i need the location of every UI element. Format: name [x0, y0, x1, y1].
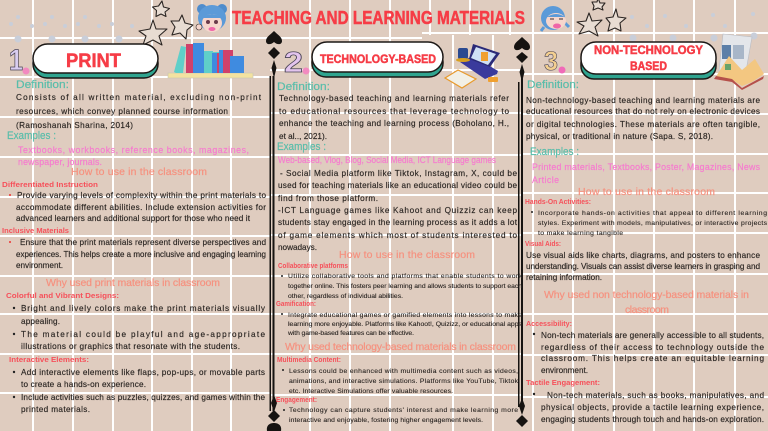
why used non technology-based materials: regardless of their access to technology outside the — [541, 343, 764, 352]
why used print materials: to create a hands-on experience. — [21, 380, 146, 389]
heading pill: non-technology based: NON-TECHNOLOGY — [594, 45, 703, 57]
how to use in the classroom: accommodate different abilities. Include extension activities for — [16, 203, 266, 212]
examples: -ICT Language games like Kahoot and Quizziz can keep — [278, 206, 517, 215]
examples — [7, 130, 249, 167]
icon: chibi girl left — [196, 4, 227, 32]
icon: newspaper and open book — [714, 34, 764, 90]
how to use in the classroom: styles. Experiment with models, manipulatives, or interactive projects — [538, 220, 768, 227]
why used technology-based materials: Lessons could be enhanced with multimedia content such as videos, — [289, 368, 518, 375]
why used non technology-based materials — [526, 289, 764, 424]
why used print materials: illustrations or graphics that resonate with the students. — [21, 342, 240, 351]
how to use in the classroom — [525, 186, 768, 282]
why used non technology-based materials: environment. — [541, 366, 588, 375]
how to use in the classroom — [276, 249, 523, 337]
panel: print — [2, 43, 266, 414]
how to use in the classroom: Differentiated Instruction — [2, 180, 98, 189]
number 3 — [544, 46, 566, 76]
examples: Article — [532, 175, 559, 185]
why used non technology-based materials: Non-tech materials are generally accessible to all students, — [541, 331, 764, 340]
how to use in the classroom: Use visual aids like charts, diagrams, and posters to enhance — [526, 251, 760, 260]
how to use in the classroom: Collaborative platforms — [278, 261, 348, 270]
why used print materials: Interactive Elements: — [9, 355, 89, 364]
heading pill: non-technology based: BASED — [630, 61, 667, 73]
examples: Textbooks, workbooks, reference books, magazines, — [18, 145, 249, 155]
examples: nowadays. — [278, 243, 317, 252]
examples: students stay engaged in the learning process as it adds a lot — [278, 218, 518, 227]
examples: newspaper, journals. — [18, 157, 102, 167]
examples: Examples : — [7, 130, 56, 142]
definition: educational resources that do not rely on electronic devices — [526, 107, 760, 116]
how to use in the classroom: with game-based features can be effective. — [287, 330, 414, 337]
examples: Examples : — [277, 141, 326, 153]
why used non technology-based materials: Tactile Engagement: — [526, 378, 600, 387]
why used non technology-based materials: classroom. This helps create an equitable learning — [541, 354, 764, 363]
definition: Definition: — [527, 79, 579, 91]
why used non technology-based materials: physical objects, provide a tactile learning experience, — [541, 403, 764, 412]
definition: Definition: — [16, 79, 69, 91]
why used non technology-based materials: classroom — [625, 304, 669, 316]
why used technology-based materials: etc. Interactive Simulations offer valuable resources. — [289, 388, 453, 395]
why used print materials — [6, 277, 266, 414]
title: TEACHING AND LEARNING MATERIALS — [232, 8, 525, 28]
how to use in the classroom: Hands-On Activities: — [525, 197, 591, 206]
definition — [526, 79, 760, 141]
number 3: 3 — [544, 46, 558, 76]
why used print materials: Why used print materials in classroom — [46, 277, 220, 289]
why used technology-based materials: Why used technology-based materials in classroom — [285, 341, 516, 353]
panel: technology-based — [276, 42, 523, 424]
heading pill: technology-based — [312, 42, 443, 77]
how to use in the classroom: How to use in the classroom — [339, 249, 475, 261]
how to use in the classroom: Incorporate hands-on activities that appeal to different learning — [538, 210, 767, 217]
number 2: 2 — [284, 47, 303, 79]
why used print materials: The material could be playful and age-appropriate — [21, 330, 265, 339]
definition: et al.., 2021). — [279, 132, 327, 141]
why used print materials: Include activities such as puzzles, quizzes, and games within the — [21, 393, 265, 402]
definition: Technology-based teaching and learning materials refer — [279, 94, 509, 103]
how to use in the classroom: understanding. Visuals can assist diverse learners in grasping and — [526, 262, 760, 271]
why used non technology-based materials: engaging students through touch and hands-on exploration. — [541, 415, 764, 424]
why used technology-based materials: interactive and enjoyable, fostering higher engagement levels. — [289, 417, 483, 424]
divider: left ornament and rules — [266, 31, 282, 431]
definition: Consists of all written material, excluding non-print — [16, 93, 262, 102]
examples — [277, 141, 518, 252]
icon: stars left — [139, 1, 193, 45]
how to use in the classroom — [2, 166, 266, 270]
definition: or digital technologies. These materials are often tangible, — [526, 120, 760, 129]
heading pill: print — [33, 44, 158, 78]
definition — [16, 79, 262, 130]
how to use in the classroom: to make learning tangible — [538, 230, 623, 237]
examples — [530, 146, 761, 185]
heading pill: print: PRINT — [66, 51, 121, 72]
heading pill: technology-based: TECHNOLOGY-BASED — [320, 52, 436, 66]
examples: used for teaching materials like an educational video could be — [278, 181, 517, 190]
how to use in the classroom: other, regardless of individual abilities. — [288, 293, 403, 300]
panel: non-technology-based — [525, 34, 768, 424]
decoration: hanging dots top right — [630, 12, 758, 42]
how to use in the classroom: experiences. This helps create a more inclusive and engaging learning — [16, 250, 266, 259]
icon: laptop, mug and notebook — [445, 44, 500, 88]
definition: Definition: — [277, 81, 330, 93]
definition: resources, which convey planned course information — [16, 107, 228, 116]
how to use in the classroom: together online. This fosters peer learning and allows students to support each — [288, 283, 522, 290]
divider: right ornament and rules — [514, 37, 530, 427]
how to use in the classroom: Integrate educational games or gamified elements into lessons to make — [288, 312, 522, 319]
examples: Examples : — [530, 146, 579, 158]
decoration: hanging dots top left — [9, 15, 134, 42]
how to use in the classroom: Ensure that the print materials represent diverse perspectives and — [20, 238, 266, 247]
how to use in the classroom: learning more enjoyable. Platforms like Kahoot!, Quizizz, or educational apps — [288, 321, 523, 328]
number 1: 1 — [9, 44, 23, 77]
why used technology-based materials: Engagement: — [276, 395, 317, 404]
definition: to educational resources that leverage technology to — [279, 107, 509, 116]
how to use in the classroom: Visual Aids: — [525, 239, 561, 248]
how to use in the classroom: advanced learners and additional support for those who need it — [16, 214, 251, 223]
number 2 — [284, 47, 310, 79]
how to use in the classroom: Utilize collaborative tools and platforms that enable students to work — [288, 273, 523, 280]
definition: enhance the teaching and learning process (Boholano, H., — [279, 119, 509, 128]
icon: chibi girl right — [541, 6, 569, 31]
why used print materials: appealing. — [21, 317, 60, 326]
why used print materials: Bright and lively colors make the print materials visually — [21, 304, 266, 313]
heading pill: non-technology based — [581, 42, 716, 79]
how to use in the classroom: Provide varying levels of complexity within the print materials to — [17, 191, 266, 200]
why used print materials: Colorful and Vibrant Designs: — [6, 291, 119, 300]
examples: of game elements which most of students interested to — [278, 231, 517, 240]
examples: - Social Media platform like Tiktok, Instagram, X, could be — [280, 169, 517, 178]
why used non technology-based materials: Why used non technology-based materials in — [544, 289, 749, 301]
icon: books on a shelf — [168, 43, 253, 78]
how to use in the classroom: How to use in the classroom — [578, 186, 715, 198]
why used print materials: printed materials. — [21, 405, 90, 414]
definition: physical, or traditional in nature (Sapa. S, 2018). — [526, 132, 713, 141]
why used technology-based materials — [276, 341, 519, 424]
why used technology-based materials: animations, and interactive simulations. Platforms like YouTube, Tiktok — [289, 378, 519, 385]
why used non technology-based materials: Accessibility: — [526, 319, 572, 328]
how to use in the classroom: environment. — [16, 261, 63, 270]
definition: Non-technology-based teaching and learning materials are — [526, 96, 760, 105]
how to use in the classroom: Inclusive Materials — [2, 226, 69, 235]
icon: stars right — [577, 0, 626, 36]
how to use in the classroom: Gamification: — [276, 299, 316, 308]
examples: Printed materials, Textbooks, Poster, Magazines, News — [532, 162, 761, 172]
why used non technology-based materials: Non-tech materials, such as books, manipulatives, and — [547, 391, 764, 400]
definition: (Ramoshanah Sharina, 2014) — [16, 121, 133, 130]
why used technology-based materials: Multimedia Content: — [277, 355, 341, 364]
why used print materials: Add interactive elements like flaps, pop-ups, or movable parts — [21, 368, 265, 377]
how to use in the classroom: How to use in the classroom — [71, 166, 207, 178]
how to use in the classroom: retaining information. — [526, 273, 602, 282]
definition — [277, 81, 509, 141]
examples: Web-based, Vlog, Blog, Social Media, ICT Language games — [278, 155, 497, 165]
examples: find from those platform. — [278, 194, 378, 203]
why used technology-based materials: Technology can capture students' interest and make learning more — [289, 407, 518, 414]
